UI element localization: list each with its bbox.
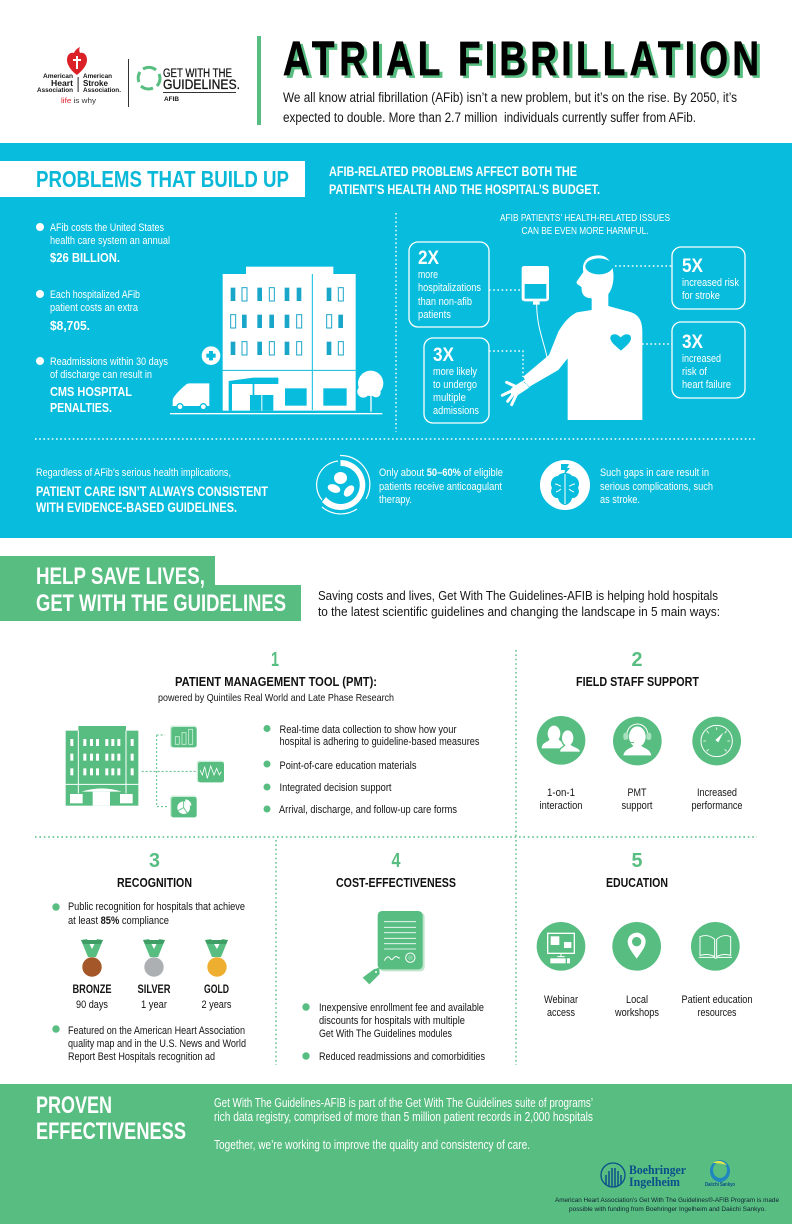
cost bullets: Each hospitalized AFib — [50, 289, 140, 301]
heading: help save lives: HELP SAVE LIVES, — [36, 563, 205, 590]
bullet: featured: quality map and in the U.S. News and World — [68, 1038, 246, 1050]
bullet: featured — [52, 1025, 246, 1063]
medal: gold: GOLD — [204, 982, 229, 996]
anticoagulant text: therapy. — [379, 494, 412, 506]
heading: problems that build up — [0, 161, 305, 197]
logo: American Heart Association and American Stroke Association — [37, 47, 121, 105]
callout: 5X stroke: for stroke — [682, 290, 720, 302]
care gaps text: Such gaps in care result in — [600, 467, 709, 479]
list: tool features: Arrival, discharge, and follow-up care forms — [279, 804, 457, 816]
logo: Get With The Guidelines AFib: GET WITH THE — [163, 68, 232, 80]
cost bullets: AFib costs the United States — [50, 222, 164, 234]
header: logos, title and intro — [37, 32, 762, 125]
medal: bronze — [72, 939, 112, 1011]
field staff labels: performance — [692, 800, 742, 812]
cost bullets: of discharge can result in — [50, 369, 152, 381]
intro to five ways — [318, 588, 720, 619]
number 1: 1 — [271, 649, 279, 671]
education labels — [544, 994, 752, 1019]
logo: Boehringer Ingelheim — [601, 1162, 686, 1189]
callout: 2X hospitalizations — [409, 242, 489, 327]
intro text — [283, 90, 737, 125]
logo: American Heart Association and American Stroke Association: Stroke — [83, 79, 109, 88]
heading proven effectiveness: EFFECTIVENESS — [36, 1118, 186, 1145]
icon: signed document with tag — [363, 911, 425, 984]
list: tool features: hospital is adhering to guideline-based measures — [280, 736, 480, 748]
title: ATRIAL — [286, 35, 443, 89]
health issues heading — [500, 212, 670, 237]
anticoagulant text: patients receive anticoagulant — [379, 481, 502, 493]
education labels: workshops — [614, 1007, 659, 1019]
callout: 3X heart failure: 3X — [682, 332, 703, 353]
subheading: powered by Quintiles Real World and Late Phase Research — [158, 692, 394, 704]
medal: gold — [202, 939, 232, 1011]
care gaps text: as stroke. — [600, 494, 640, 506]
cost bullets: $26 BILLION. — [50, 250, 120, 265]
education labels: Webinar — [544, 994, 578, 1006]
anticoagulant text: Only about 50–60% of eligible — [379, 467, 503, 479]
statement: patient care: WITH EVIDENCE-BASED GUIDELINES. — [36, 500, 237, 515]
footer text — [214, 1096, 593, 1152]
heading proven effectiveness — [36, 1092, 186, 1145]
medal: bronze: 90 days — [76, 999, 108, 1011]
bullet: featured: Featured on the American Heart Association — [68, 1025, 245, 1037]
bullets: cost — [302, 1002, 485, 1063]
funding note: American Heart Association’s Get With The Guidelines®-AFIB Program is made — [555, 1196, 779, 1204]
callout: 2X hospitalizations: patients — [418, 309, 451, 321]
panel: 4 cost-effectiveness — [302, 850, 485, 1063]
logo: American Heart Association and American Stroke Association: American — [43, 74, 73, 80]
bullet: public recognition: at least 85% compliance — [68, 915, 169, 927]
cost bullets — [36, 222, 170, 415]
icon: one on one — [537, 716, 585, 765]
icon: gauge performance — [692, 717, 741, 765]
medal: bronze: BRONZE — [72, 982, 112, 996]
icon: webinar — [537, 922, 585, 971]
heading proven effectiveness: PROVEN — [36, 1092, 112, 1119]
field staff labels: Increased — [697, 787, 737, 799]
panel: problems that build up — [0, 143, 792, 538]
medal: gold: 2 years — [202, 999, 232, 1011]
panel: 3 recognition — [52, 850, 246, 1063]
icon: hospital building with ambulance and tree — [170, 267, 383, 414]
footer text: Together, we’re working to improve the quality and consistency of care. — [214, 1138, 530, 1152]
cost bullets: Readmissions within 30 days — [50, 356, 168, 368]
anticoagulant text — [379, 467, 503, 506]
list: tool features: Point-of-care education materials — [280, 760, 417, 772]
bullet: featured: Report Best Hospitals recognition ad — [68, 1051, 215, 1063]
subheading: AFIB-RELATED PROBLEMS AFFECT BOTH THE — [329, 164, 577, 179]
field staff labels — [540, 787, 742, 812]
number 2: 2 — [632, 649, 642, 671]
statement: patient care: PATIENT CARE ISN’T ALWAYS CONSISTENT — [36, 484, 269, 499]
logo: American Heart Association and American Stroke Association: Association. — [83, 88, 121, 94]
cost bullets: health care system an annual — [50, 235, 170, 247]
logo: American Heart Association and American Stroke Association: Association — [37, 88, 73, 94]
logo: Daiichi Sankyo: Daiichi Sankyo — [705, 1182, 735, 1188]
funding note: possible with funding from Boehringer Ingelheim and Daiichi Sankyo. — [569, 1206, 766, 1213]
education labels: Local — [626, 994, 648, 1006]
footer text: rich data registry, comprised of more than 5 million patient records in 2,000 hospitals — [214, 1110, 593, 1124]
heading PMT: PATIENT MANAGEMENT TOOL (PMT): — [175, 674, 377, 689]
title: ATRIAL — [283, 32, 440, 86]
heading education: EDUCATION — [606, 875, 668, 890]
medal: silver: SILVER — [138, 982, 171, 996]
intro text: expected to double. More than 2.7 million individuals currently suffer from AFib. — [283, 110, 696, 125]
logo: American Heart Association and American Stroke Association: life is why — [61, 96, 96, 105]
field staff labels: PMT — [628, 787, 647, 799]
bullets: cost: Reduced readmissions and comorbidities — [319, 1051, 485, 1063]
subheading: PATIENT’S HEALTH AND THE HOSPITAL’S BUDGET. — [329, 182, 600, 197]
bullet: public recognition: Public recognition for hospitals that achieve — [68, 901, 245, 913]
intro to five ways: Saving costs and lives, Get With The Guidelines-AFIB is helping hold hospitals — [318, 588, 718, 603]
callout: 3X heart failure: risk of — [682, 366, 708, 378]
callout: 3X heart failure — [672, 322, 745, 398]
callout: 3X admissions: 3X — [433, 345, 454, 366]
callout: 3X admissions: more likely — [433, 366, 477, 378]
intro text: We all know atrial fibrillation (AFib) isn’t a new problem, but it’s on the rise. By 2050, it’s — [283, 90, 737, 105]
logo: American Heart Association and American Stroke Association: Heart — [51, 79, 73, 88]
heading: help save lives: GET WITH THE GUIDELINES — [36, 590, 286, 617]
health issues heading: CAN BE EVEN MORE HARMFUL. — [522, 225, 648, 237]
heading: help save lives — [0, 556, 301, 621]
title: FIBRILLATION — [458, 32, 759, 86]
panel: proven effectiveness footer — [0, 1084, 792, 1224]
intro to five ways: to the latest scientific guidelines and changing the landscape in 5 main ways: — [318, 604, 720, 619]
logo: Get With The Guidelines AFib: GUIDELINES. — [163, 76, 240, 92]
callout: 5X stroke: 5X — [682, 256, 703, 277]
list: tool features: Integrated decision support — [280, 782, 392, 794]
heading cost-effectiveness: COST-EFFECTIVENESS — [336, 875, 456, 890]
callout: 3X admissions: admissions — [433, 405, 479, 417]
callout: 3X admissions: to undergo — [433, 379, 477, 391]
logo: Boehringer Ingelheim: Boehringer — [629, 1162, 686, 1177]
icon: open book — [691, 922, 740, 971]
bullets: cost: Get With The Guidelines modules — [319, 1028, 452, 1040]
cost bullets: CMS HOSPITAL — [50, 384, 132, 399]
field staff labels: interaction — [540, 800, 582, 812]
panel: 1 patient management tool — [66, 649, 480, 817]
callout: 5X stroke — [672, 247, 745, 309]
callout: 2X hospitalizations: more — [418, 269, 438, 281]
number 4: 4 — [392, 850, 401, 872]
footer text: Get With The Guidelines-AFIB is part of the Get With The Guidelines suite of programs’ — [214, 1096, 593, 1110]
panel: 2 field staff support — [537, 649, 742, 812]
illustration: patient with IV bag — [502, 255, 642, 420]
panel: 5 education — [537, 850, 752, 1019]
icon: anticoagulant pills — [317, 455, 370, 514]
cost bullets: patient costs an extra — [50, 302, 139, 314]
number 5: 5 — [632, 850, 642, 872]
care gaps text: serious complications, such — [600, 481, 713, 493]
heading: problems that build up: PROBLEMS THAT BUILD UP — [36, 166, 289, 192]
cost bullets: PENALTIES. — [50, 400, 112, 415]
logo: Get With The Guidelines AFib: AFIB — [164, 96, 179, 103]
callout: 3X admissions — [424, 338, 489, 423]
logo: Daiichi Sankyo — [705, 1160, 735, 1188]
callout: 2X hospitalizations: than non-afib — [418, 296, 472, 308]
bullets: cost: Inexpensive enrollment fee and available — [319, 1002, 484, 1014]
statement: patient care: Regardless of AFib’s serious health implications, — [36, 467, 231, 479]
callout: 3X heart failure: increased — [682, 353, 721, 365]
field staff labels: 1-on-1 — [547, 787, 575, 799]
icon: headset support — [613, 717, 662, 765]
callout: 2X hospitalizations: hospitalizations — [418, 282, 481, 294]
callout: 2X hospitalizations: 2X — [418, 248, 439, 269]
subheading — [329, 164, 600, 197]
number 3: 3 — [149, 850, 160, 872]
funding note — [555, 1196, 779, 1213]
list: tool features: Real-time data collection to show how your — [280, 724, 457, 736]
list: tool features — [264, 724, 480, 816]
bullet: public recognition — [52, 901, 245, 927]
cost bullets: $8,705. — [50, 318, 90, 333]
statement: patient care — [36, 467, 269, 515]
bullets: cost: discounts for hospitals with multiple — [319, 1015, 465, 1027]
logo: Boehringer Ingelheim: Ingelheim — [629, 1174, 680, 1189]
callout: 5X stroke: increased risk — [682, 277, 739, 289]
logo: Get With The Guidelines AFib — [138, 67, 240, 103]
heading recognition: RECOGNITION — [117, 875, 192, 890]
icon: hospital connected to data — [66, 726, 224, 817]
callout: 3X admissions: multiple — [433, 392, 466, 404]
care gaps text — [600, 467, 713, 506]
medal: silver: 1 year — [141, 999, 167, 1011]
field staff labels: support — [622, 800, 652, 812]
medal: silver — [138, 939, 171, 1011]
icon: location pin — [612, 922, 661, 971]
title — [283, 32, 762, 89]
logo: American Heart Association and American Stroke Association: American — [83, 74, 112, 80]
education labels: access — [547, 1007, 575, 1019]
heading field staff: FIELD STAFF SUPPORT — [576, 674, 699, 689]
education labels: resources — [698, 1007, 737, 1019]
icon: brain with lightning — [540, 460, 590, 510]
callout: 3X heart failure: heart failure — [682, 379, 731, 391]
education labels: Patient education — [682, 994, 752, 1006]
title: FIBRILLATION — [461, 35, 762, 89]
health issues heading: AFIB PATIENTS’ HEALTH-RELATED ISSUES — [500, 212, 670, 224]
